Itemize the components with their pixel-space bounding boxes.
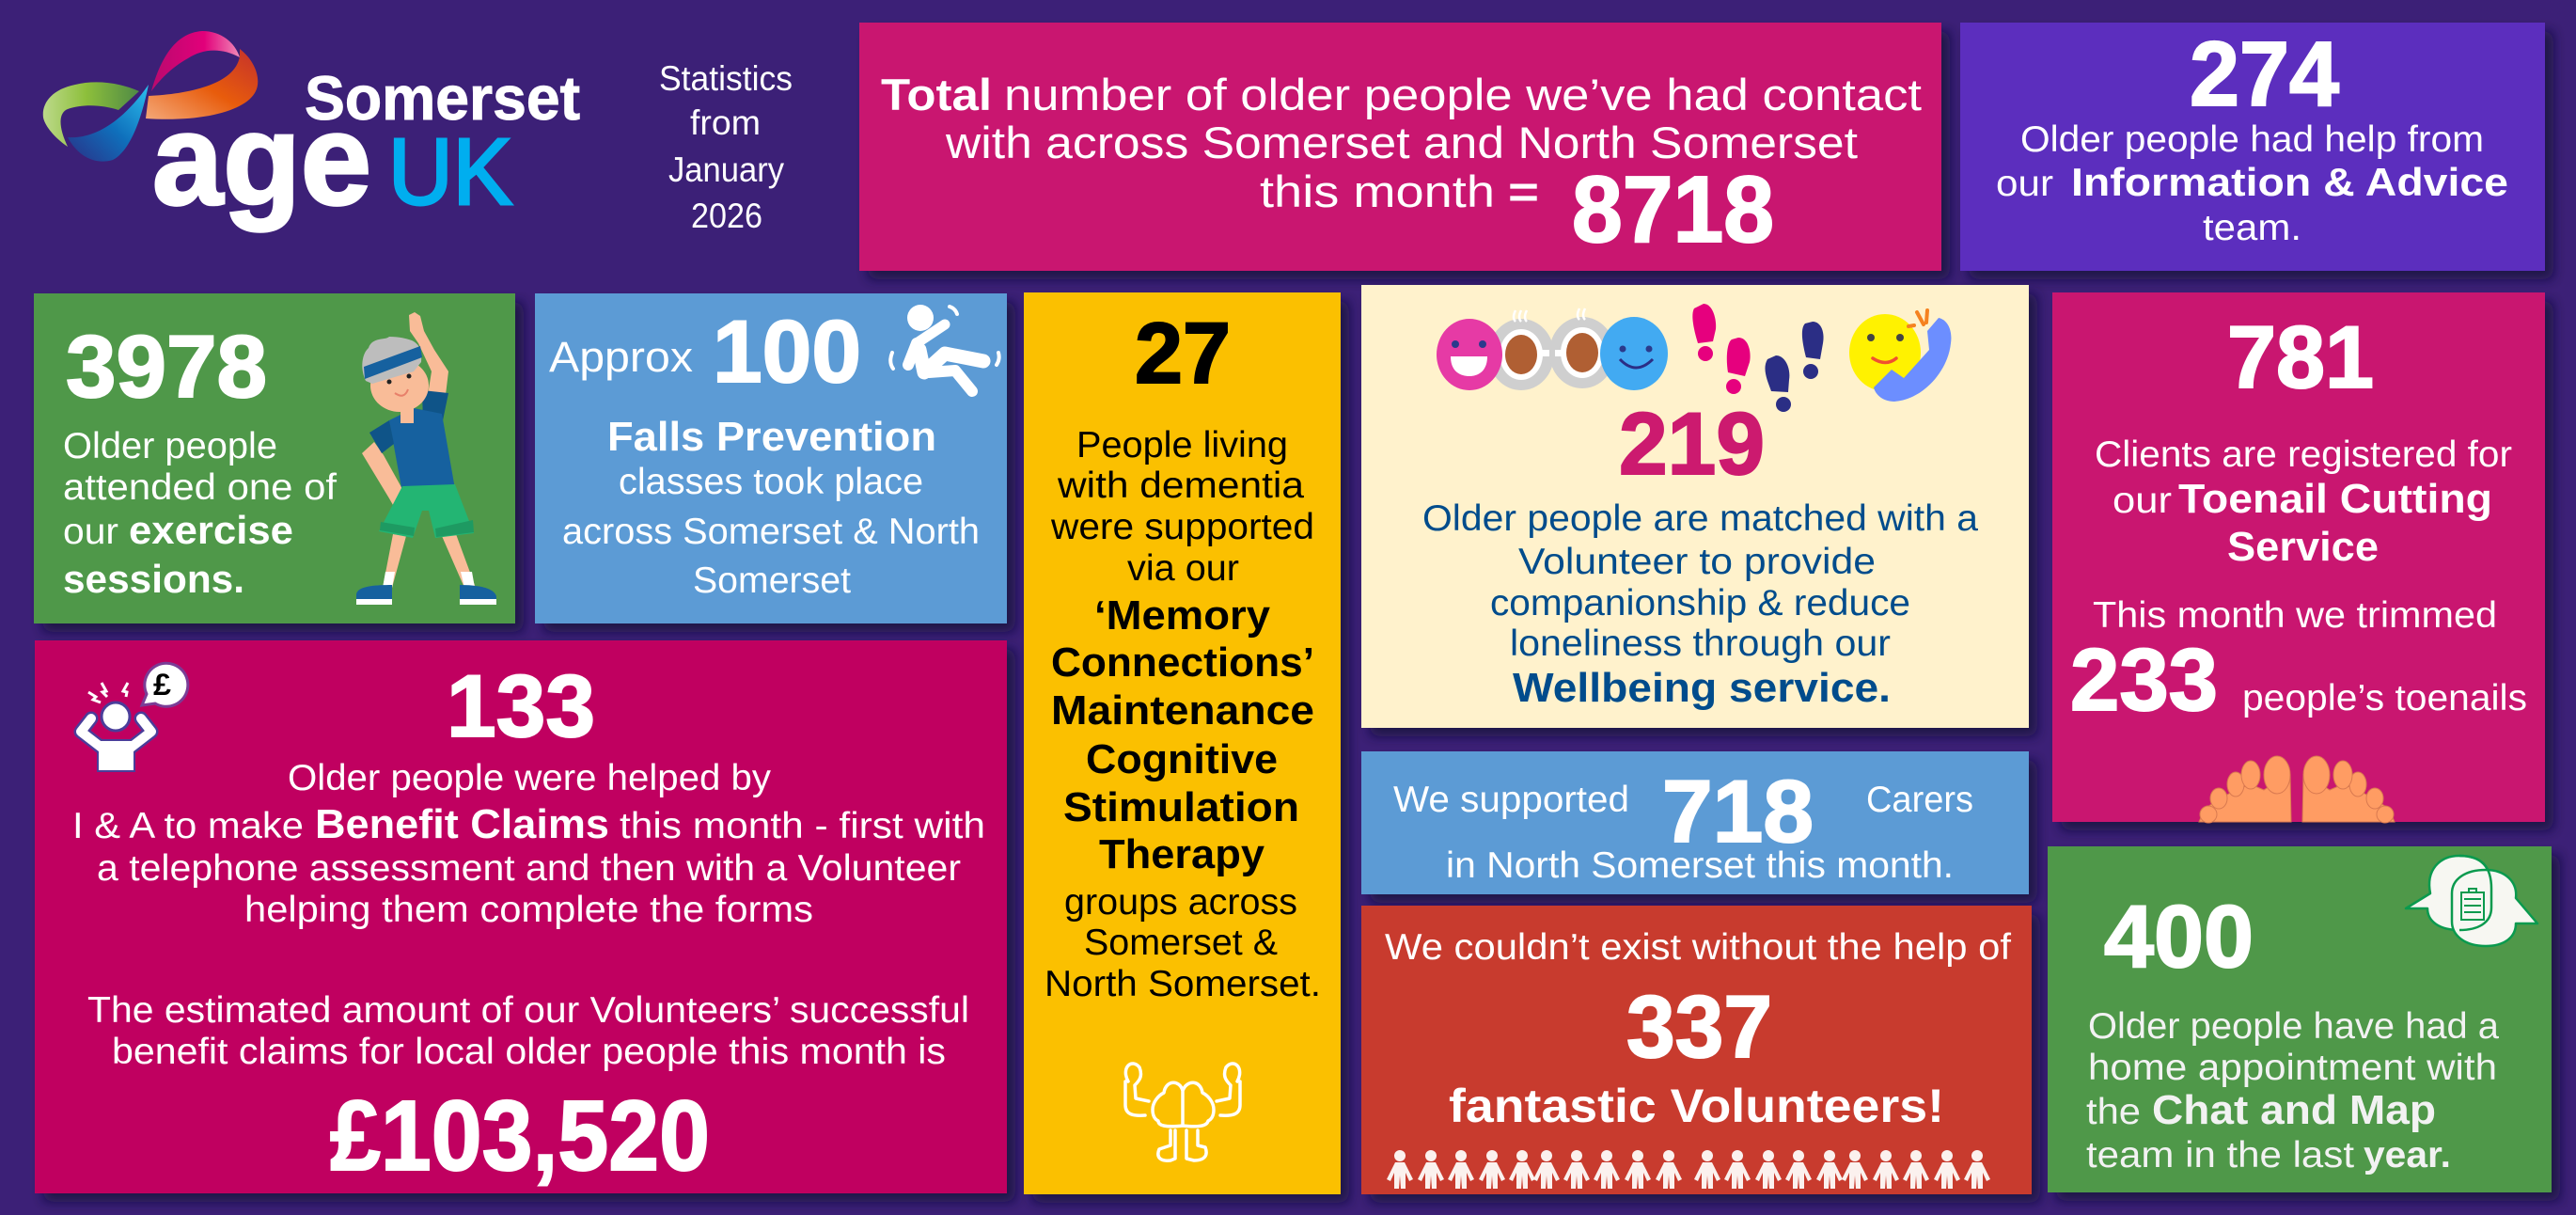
text block: dementia support: Stimulation — [1063, 784, 1299, 830]
text block: falls prevention: classes took place — [619, 462, 923, 502]
logo text: Somerset: Somerset — [305, 63, 580, 133]
icon: person falling — [890, 305, 999, 391]
text block: dementia support: via our — [1127, 548, 1239, 589]
number: 400: 400 — [2104, 887, 2254, 986]
text block: toenail cutting: Toenail Cutting — [2178, 476, 2492, 522]
number: 274: 274 — [2190, 23, 2339, 125]
panel: chat and map — [2048, 846, 2552, 1192]
logo text: UK: UK — [388, 119, 512, 225]
icon: speech bubbles with clipboard — [2406, 856, 2537, 946]
text block: wellbeing service: Wellbeing service. — [1513, 665, 1891, 711]
text block: total contact — [881, 70, 1922, 216]
number: 3978: 3978 — [66, 317, 267, 416]
panel: carers — [1361, 751, 2029, 894]
number: 27: 27 — [1135, 306, 1231, 402]
text block: toenail cutting: Service — [2227, 524, 2379, 570]
text block: dementia support: with dementia — [1057, 465, 1304, 506]
text block: chat and map — [2086, 1006, 2499, 1176]
text block: information and advice: team. — [2203, 208, 2301, 248]
text block: benefit claims: helping them complete the forms — [244, 890, 813, 930]
text block: falls prevention: across Somerset & North — [562, 512, 980, 552]
text: we supported: We supported — [1393, 780, 1629, 820]
text: people's toenails: people’s toenails — [2242, 678, 2527, 718]
icon: faces and coffee cups — [1437, 308, 1668, 390]
text block: dementia support: Therapy — [1099, 831, 1265, 877]
number: 718: 718 — [1662, 762, 1814, 860]
text block: wellbeing service: loneliness through our — [1510, 623, 1891, 664]
text block: total contact: number of older people we’ve had contact — [1004, 70, 1922, 119]
text block: exercise sessions: attended one of — [63, 467, 337, 508]
icon: smiling face on phone — [1849, 310, 1951, 402]
text block: chat and map: Chat and Map — [2152, 1087, 2436, 1133]
text block: dementia support: North Somerset. — [1045, 964, 1321, 1004]
date text block — [659, 59, 793, 235]
text: fantastic volunteers: fantastic Volunteers! — [1449, 1080, 1944, 1132]
text block: estimated claims: The estimated amount of our Volunteers’ successful — [87, 990, 969, 1031]
icon: worried person with pound bubble: £ — [153, 668, 171, 702]
panel: benefit claims — [35, 640, 1007, 1193]
number: 781: 781 — [2227, 308, 2374, 406]
text block: exercise sessions: our — [63, 512, 118, 552]
text block: dementia support: Connections’ — [1051, 639, 1314, 686]
text block: toenail cutting: our — [2113, 481, 2172, 521]
text block: exercise sessions: sessions. — [63, 557, 244, 601]
panel: exercise sessions — [34, 293, 515, 623]
text block: dementia support: People living — [1076, 425, 1288, 465]
panel: volunteers — [1361, 906, 2032, 1194]
number: 337: 337 — [1626, 977, 1772, 1076]
text block: chat and map: home appointment with — [2088, 1048, 2497, 1088]
text block: falls prevention: Somerset — [693, 560, 851, 601]
text block: total contact: this month — [1260, 166, 1495, 216]
icon: bare feet — [2199, 756, 2395, 823]
panel: total contact — [859, 23, 1941, 271]
panel: information and advice — [1960, 23, 2545, 271]
text block: toenail cutting: This month we trimmed — [2093, 595, 2497, 636]
text block: chat and map: Older people have had a — [2088, 1006, 2499, 1047]
text block: chat and map: the — [2086, 1092, 2141, 1132]
icon: muscular brain — [1125, 1064, 1240, 1160]
text block: falls prevention: Falls Prevention — [607, 414, 936, 460]
panel: falls prevention — [535, 293, 1007, 623]
panel: memory connections — [1024, 292, 1341, 1194]
text block: exercise sessions — [63, 426, 337, 601]
number: 233: 233 — [2070, 630, 2218, 729]
number: 100: 100 — [713, 302, 861, 401]
text block: dementia support: were supported — [1050, 507, 1314, 547]
text block: benefit claims — [72, 758, 985, 930]
icon: infinity ribbon — [43, 31, 258, 162]
text block: wellbeing service: Volunteer to provide — [1518, 542, 1876, 582]
text block: wellbeing service — [1422, 498, 1978, 711]
text block: information and advice: our — [1996, 164, 2053, 204]
text block: chat and map: team in the last — [2086, 1135, 2354, 1176]
text: we couldn't exist: We couldn’t exist without the help of — [1385, 927, 2011, 968]
text block: information and advice: Older people had help from — [2020, 119, 2484, 160]
text: approx: Approx — [549, 333, 694, 381]
text block: dementia support: Maintenance — [1051, 687, 1314, 734]
text block: benefit claims: Older people were helped by — [288, 758, 772, 798]
text: carers: Carers — [1866, 780, 1973, 820]
icon: exercising older man — [356, 312, 496, 605]
panel: wellbeing service — [1361, 285, 2029, 728]
text block: total contact: = — [1508, 166, 1539, 216]
text block: dementia support: ‘Memory — [1094, 592, 1271, 639]
date text block: Statistics — [659, 59, 793, 98]
text block: benefit claims: a telephone assessment and then with a Volunteer — [97, 848, 961, 889]
text block: information and advice — [1996, 119, 2508, 248]
text block: benefit claims: I & A to make — [72, 806, 304, 846]
text block: dementia support: Cognitive — [1086, 736, 1278, 782]
number: 219: 219 — [1619, 394, 1765, 493]
text block: toenail cutting — [2093, 434, 2512, 636]
text block: chat and map: year. — [2364, 1135, 2451, 1176]
text block: benefit claims: this month - first with — [620, 806, 985, 846]
text block: estimated claims: benefit claims for local older people this month is — [112, 1032, 946, 1072]
text block: dementia support — [1045, 425, 1321, 1004]
logo text: age: age — [152, 87, 371, 232]
text block: wellbeing service: Older people are matched with a — [1422, 498, 1978, 539]
logo: Age UK Somerset — [43, 31, 580, 232]
date text block: from — [690, 103, 761, 142]
text block: benefit claims: Benefit Claims — [315, 801, 609, 847]
text block: estimated claims — [87, 990, 969, 1072]
number: 133: 133 — [447, 656, 595, 755]
date text block: 2026 — [691, 197, 762, 235]
text block: dementia support: Somerset & — [1084, 923, 1278, 963]
text block: information and advice: Information & Advice — [2071, 160, 2508, 204]
text block: total contact: with across Somerset and North Somerset — [945, 118, 1858, 167]
number: 8718: 8718 — [1572, 157, 1774, 262]
text: in north somerset: in North Somerset this month. — [1446, 845, 1954, 886]
number: £103,520: £103,520 — [330, 1081, 710, 1191]
icon: worried person with pound bubble — [81, 663, 188, 772]
date text block: January — [668, 150, 784, 189]
text block: toenail cutting: Clients are registered for — [2095, 434, 2512, 475]
icon: footprints — [1692, 304, 1824, 412]
text block: exercise sessions: Older people — [63, 426, 277, 466]
text block: exercise sessions: exercise — [129, 508, 293, 552]
text block: falls prevention — [562, 414, 980, 601]
icon: row of people — [1387, 1150, 1990, 1189]
text block: total contact: Total — [881, 70, 992, 119]
text block: dementia support: groups across — [1064, 882, 1297, 923]
panel: toenail cutting — [2052, 292, 2545, 823]
text block: wellbeing service: companionship & reduce — [1490, 583, 1910, 623]
